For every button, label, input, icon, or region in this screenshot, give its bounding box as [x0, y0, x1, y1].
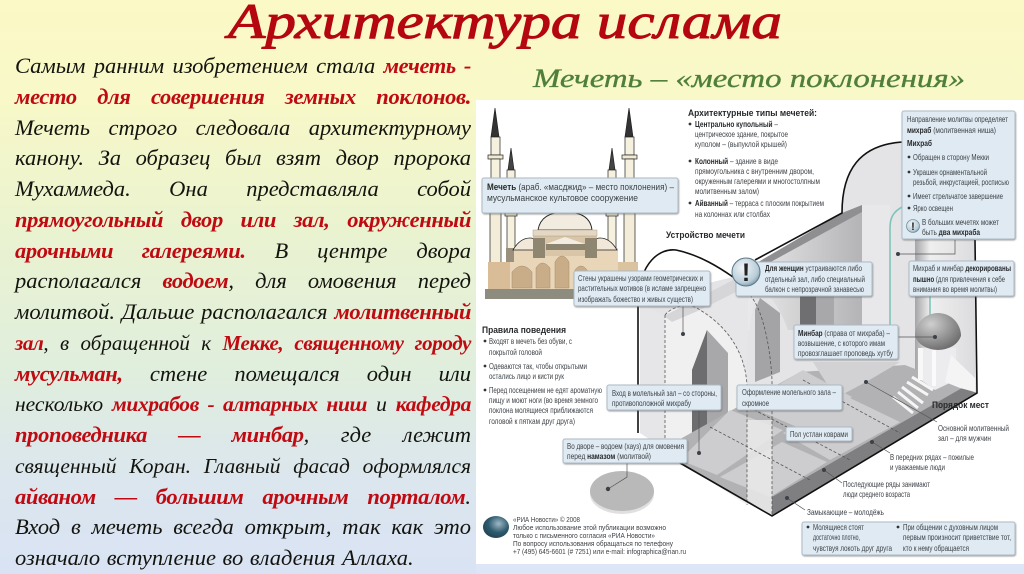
roof wedge — [740, 205, 862, 330]
bottom strip — [476, 564, 1024, 574]
body text block: Мечеть строго следовала архитектурному — [15, 114, 471, 140]
teal lines — [890, 207, 930, 364]
seating order: Последующие ряды занимают — [843, 479, 930, 489]
callout: bottom notes — [802, 522, 1015, 555]
left tall minaret — [488, 108, 503, 263]
left wall and arches — [640, 279, 748, 505]
body text block: место для совершения земных поклонов. — [15, 84, 471, 109]
rules of conduct: Входят в мечеть без обуви, с — [489, 336, 572, 346]
copyright: По вопросу использования обращаться по телефону — [513, 539, 673, 548]
body text block: канону. За образец был взят двор пророка — [15, 145, 471, 170]
seating order: и уважаемые люди — [890, 462, 945, 472]
rules of conduct: Перед посещением не едят ароматную — [489, 385, 602, 395]
callout: women: балкон с непрозрачной занавесью — [765, 284, 864, 294]
inner wall — [862, 205, 890, 340]
left small minaret — [505, 148, 517, 260]
callout: courtyard pool — [563, 439, 687, 463]
callout: mihrab: Ярко освещен — [913, 203, 953, 213]
icon: exclamation: ! — [742, 259, 750, 287]
callout: entrance: противоположной михрабу — [612, 398, 692, 408]
right wall gradient — [915, 235, 975, 395]
minbar — [893, 313, 975, 413]
seating order: зал – для мужчин — [938, 433, 991, 443]
seating order: В передних рядах – пожилые — [890, 452, 974, 462]
text: mosque types: Айванный – терраса с плоским покрытием — [695, 198, 824, 208]
callout: decoration — [909, 261, 1014, 296]
callout: women: отдельный зал, либо специальный — [765, 274, 865, 284]
callout: carpets — [786, 427, 852, 441]
callout: minbar: возвышение, с которого имам — [798, 338, 885, 348]
callout: women: Для женщин устраиваются либо — [765, 263, 862, 273]
callout: women — [732, 258, 872, 296]
callout: hall decor — [737, 385, 842, 410]
callout: mosque definition: мусульманское культовое сооружение — [487, 193, 638, 204]
seating order: Замыкающие – молодёжь — [807, 507, 884, 517]
mosque body — [488, 212, 638, 289]
body text block: священный Коран. Главный фасад оформлялся — [15, 454, 471, 478]
callout: walls: изображать божество и живых существ) — [578, 294, 693, 304]
body text block: Самым ранним изобретением стала мечеть - — [15, 53, 471, 78]
subtitle: Мечеть – «место поклонения» — [532, 64, 965, 93]
callout: entrance: Вход в молельный зал – со стороны, — [612, 388, 717, 398]
body text block: арочными галереями. В центре двора — [15, 238, 471, 262]
rules of conduct: поклона молящиеся приближаются — [489, 405, 593, 415]
callout: walls — [574, 271, 710, 306]
callout: minbar: провозглашает проповедь хутбу — [798, 348, 894, 358]
text: mosque types: куполом – (выпуклой крышей) — [695, 139, 787, 149]
copyright — [513, 515, 686, 556]
body text block: несколько михрабов - алтарных ниш и кафедра — [15, 392, 471, 416]
callout: mihrab — [902, 111, 1015, 239]
heading: mosque types: Архитектурные типы мечетей: — [688, 108, 817, 119]
rules of conduct: Одеваются так, чтобы открытыми — [489, 361, 587, 371]
callout: carpets: Пол устлан коврами — [790, 429, 848, 439]
callout: mihrab: В больших мечетях может — [922, 217, 999, 227]
callout: bottom notes: Молящиеся стоят — [813, 522, 864, 532]
callout: entrance — [607, 385, 721, 410]
callout: mihrab: ! — [911, 221, 915, 233]
rules of conduct: покрытой головой — [489, 347, 542, 357]
callout: walls: Стены украшены узорами геометрических и — [578, 273, 703, 283]
rules of conduct: остались лицо и кисти рук — [489, 371, 564, 381]
text: mosque types: окруженным галереями и многостолпным — [695, 176, 820, 186]
callout: mihrab: михраб (молитвенная ниша) — [907, 125, 996, 135]
callout: mosque definition — [482, 178, 678, 213]
text: mosque types: Центрально купольный – — [695, 119, 778, 129]
callout: minbar: Минбар (справа от михраба) – — [798, 328, 890, 338]
body text block: айваном — большим арочным порталом. — [15, 484, 471, 508]
floor — [680, 365, 977, 516]
callout: minbar — [794, 325, 898, 359]
callout: mosque definition: Мечеть (араб. «масджид» – место поклонения) – — [487, 182, 675, 193]
rules of conduct: пищу и моют ноги (во время земного — [489, 395, 598, 405]
callout: mihrab: Обращен в сторону Мекки — [913, 152, 989, 162]
carpets — [680, 370, 900, 497]
body text block: зал, в обращенной к Мекке, священному городу — [15, 331, 471, 355]
cutaway building — [638, 142, 977, 516]
dashed arch lines — [665, 292, 900, 515]
seating order: Порядок мест — [932, 400, 989, 411]
seating order — [807, 400, 1009, 517]
copyright: только с письменного согласия «РИА Новости» — [513, 531, 655, 540]
callout: courtyard pool: перед намазом (молитвой) — [567, 451, 651, 461]
seating order: люди среднего возраста — [843, 489, 910, 499]
text: mosque types — [689, 119, 824, 219]
body text block: Вход в мечеть всегда открыт, так как это — [15, 514, 471, 539]
right small minaret — [606, 148, 618, 260]
body text block: Мухаммеда. Она представляла собой — [15, 176, 471, 201]
heading: mosque structure: Устройство мечети — [666, 230, 745, 241]
entrance strip — [747, 420, 772, 516]
text: mosque types: прямоугольника с внутренним двором, — [695, 166, 814, 176]
back wall — [640, 142, 977, 516]
callout: hall decor: Оформление молельного зала – — [742, 387, 836, 397]
callout: bottom notes: чувствуя локоть друг друга — [813, 543, 892, 553]
body text block: прямоугольный двор или зал, окруженный — [15, 207, 471, 232]
body text block: располагался водоем, для омовения перед — [15, 268, 471, 293]
copyright: «РИА Новости» © 2008 — [513, 515, 580, 524]
white image background — [476, 100, 1024, 564]
leader lines and dots — [606, 240, 955, 510]
callout: bottom notes: достаточно плотно, — [813, 532, 860, 542]
mosque plinth — [485, 289, 638, 299]
rules of conduct: Правила поведения — [482, 325, 566, 336]
right tall minaret — [622, 108, 637, 263]
body text block: означало вступление во владения Аллаха. — [15, 545, 414, 570]
body text block: мусульман, стене помещался один или — [15, 360, 471, 386]
body text block: проповедника — минбар, где лежит — [15, 422, 471, 447]
black outline — [638, 142, 977, 516]
callout: walls: растительных мотивов (в исламе запрещено — [578, 283, 706, 293]
text: mosque types: молитвенным залом) — [695, 186, 759, 196]
body text block — [14, 53, 472, 570]
copyright: +7 (495) 645-6601 (# 7251) или e-mail: infographica@rian.ru — [513, 547, 686, 556]
rules of conduct: головой к пяткам друг друга) — [489, 416, 575, 426]
front band — [772, 388, 977, 516]
text: mosque types: на колоннах или столбах — [695, 209, 771, 219]
callout: mihrab: Михраб — [907, 138, 932, 148]
body text block: молитвой. Дальше располагался молитвенный — [15, 299, 471, 324]
callout: bottom notes: кто к нему обращается — [903, 543, 969, 553]
callout: courtyard pool: Во дворе – водоем (хауз) для омовения — [567, 441, 684, 451]
callout: hall decor: скромное — [742, 398, 769, 408]
callout: mihrab: Украшен орнаментальной — [913, 167, 987, 177]
copyright: Любое использование этой публикации возможно — [513, 523, 666, 532]
logo — [483, 516, 509, 538]
text: mosque types: центрическое здание, покрытое — [695, 129, 788, 139]
rules of conduct — [482, 325, 602, 426]
mosque illustration — [485, 108, 638, 299]
text: mosque types: Колонный – здание в виде — [695, 156, 778, 166]
pool — [590, 471, 654, 514]
callout: mihrab: быть два михраба — [922, 227, 980, 237]
